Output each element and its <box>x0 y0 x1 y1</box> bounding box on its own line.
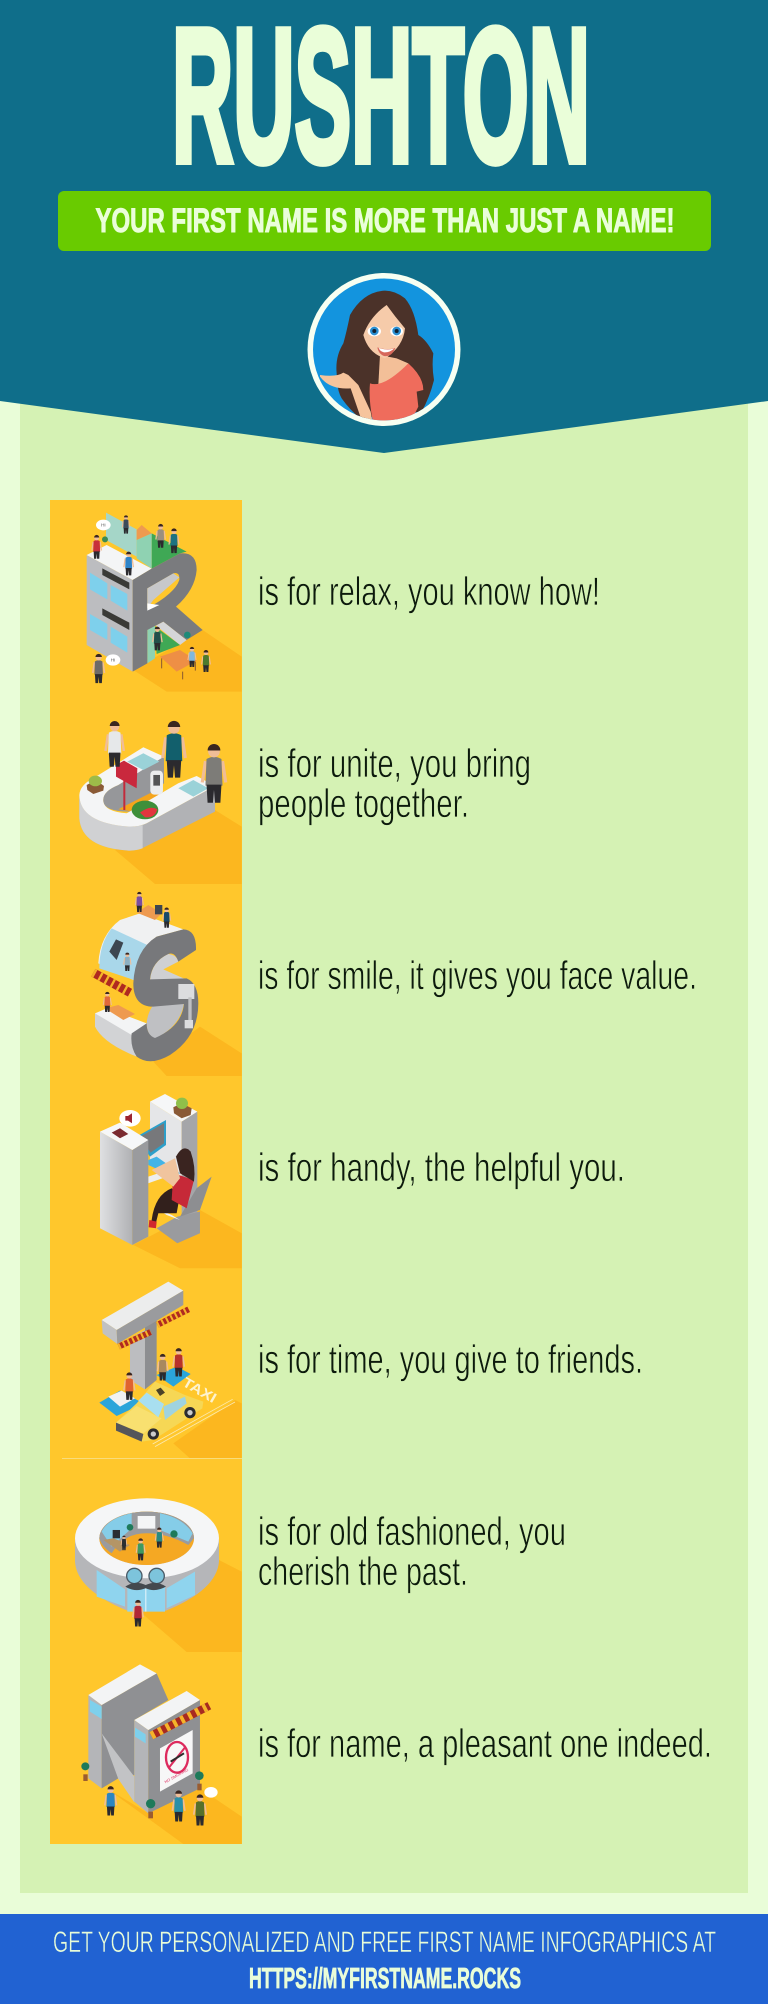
letter tiles column <box>50 500 242 1844</box>
people <box>103 892 171 1012</box>
signs <box>102 568 129 630</box>
small windows <box>90 1700 146 1743</box>
red sign <box>116 761 137 810</box>
glasses and moustache <box>125 1568 166 1590</box>
avatar: woman in circle <box>308 273 460 426</box>
taxi <box>116 1382 203 1442</box>
striped awning <box>93 973 130 993</box>
plant box <box>173 1098 192 1118</box>
S face <box>131 929 198 1061</box>
speech bubbles: Hi <box>101 523 106 528</box>
wall unit and pipe <box>178 984 194 1028</box>
text: U: people together. <box>258 782 469 826</box>
blue pads <box>99 1367 191 1416</box>
illustration: letter H desk <box>100 1094 242 1268</box>
illustration: letter S office <box>93 892 242 1076</box>
illustration: letter N shop <box>81 1664 242 1844</box>
monitor <box>137 1120 166 1157</box>
top bar <box>102 1282 183 1344</box>
counter glass tops <box>127 753 208 797</box>
people <box>105 1786 206 1826</box>
chair <box>157 1177 212 1243</box>
no smoking poster: NO SMOKING <box>164 1768 189 1784</box>
text: O: is for old fashioned, you <box>258 1510 566 1554</box>
plants <box>81 1762 204 1818</box>
text: U <box>258 742 531 826</box>
ring top <box>75 1498 219 1578</box>
speech bubbles <box>96 520 120 666</box>
speaker bubble <box>119 1110 141 1127</box>
upper and lower counters of the S <box>150 954 187 980</box>
striped awning <box>151 1706 209 1736</box>
windows and door <box>97 1570 195 1612</box>
text: O: cherish the past. <box>258 1550 468 1594</box>
people <box>92 515 210 683</box>
table <box>160 650 197 679</box>
plant <box>87 776 104 794</box>
footer url: HTTPS://MYFIRSTNAME.ROCKS <box>249 1963 521 1995</box>
road lines <box>153 1399 235 1447</box>
seated woman <box>149 1148 195 1228</box>
watermelon <box>132 801 158 819</box>
footer band <box>0 1914 768 2004</box>
people <box>124 1348 184 1400</box>
inner room <box>99 1512 194 1565</box>
front pillar <box>100 1123 148 1245</box>
stem <box>130 1321 157 1389</box>
text: O <box>258 1510 566 1594</box>
speech bubbles: Hi <box>111 658 115 663</box>
trash can <box>150 771 163 795</box>
text: R: is for relax, you know how! <box>258 570 600 614</box>
illustration: letter T taxi stand <box>99 1282 242 1458</box>
awnings <box>119 1309 189 1347</box>
desks <box>105 905 162 1020</box>
illustration: letter U counter <box>79 721 242 884</box>
text: U: is for unite, you bring <box>258 742 531 786</box>
taxi lettering: TAXI <box>180 1374 220 1406</box>
back pillar <box>150 1094 197 1223</box>
content panel <box>20 380 748 1893</box>
illustration: letter R building <box>87 513 242 692</box>
illustration: letter O optician <box>75 1498 242 1652</box>
header band with chevron <box>0 0 768 453</box>
speech bubble <box>204 1787 218 1798</box>
people <box>105 721 226 803</box>
banner <box>58 191 711 251</box>
no smoking poster <box>160 1730 193 1792</box>
text: H: is for handy, the helpful you. <box>258 1146 625 1190</box>
windows <box>90 573 127 653</box>
